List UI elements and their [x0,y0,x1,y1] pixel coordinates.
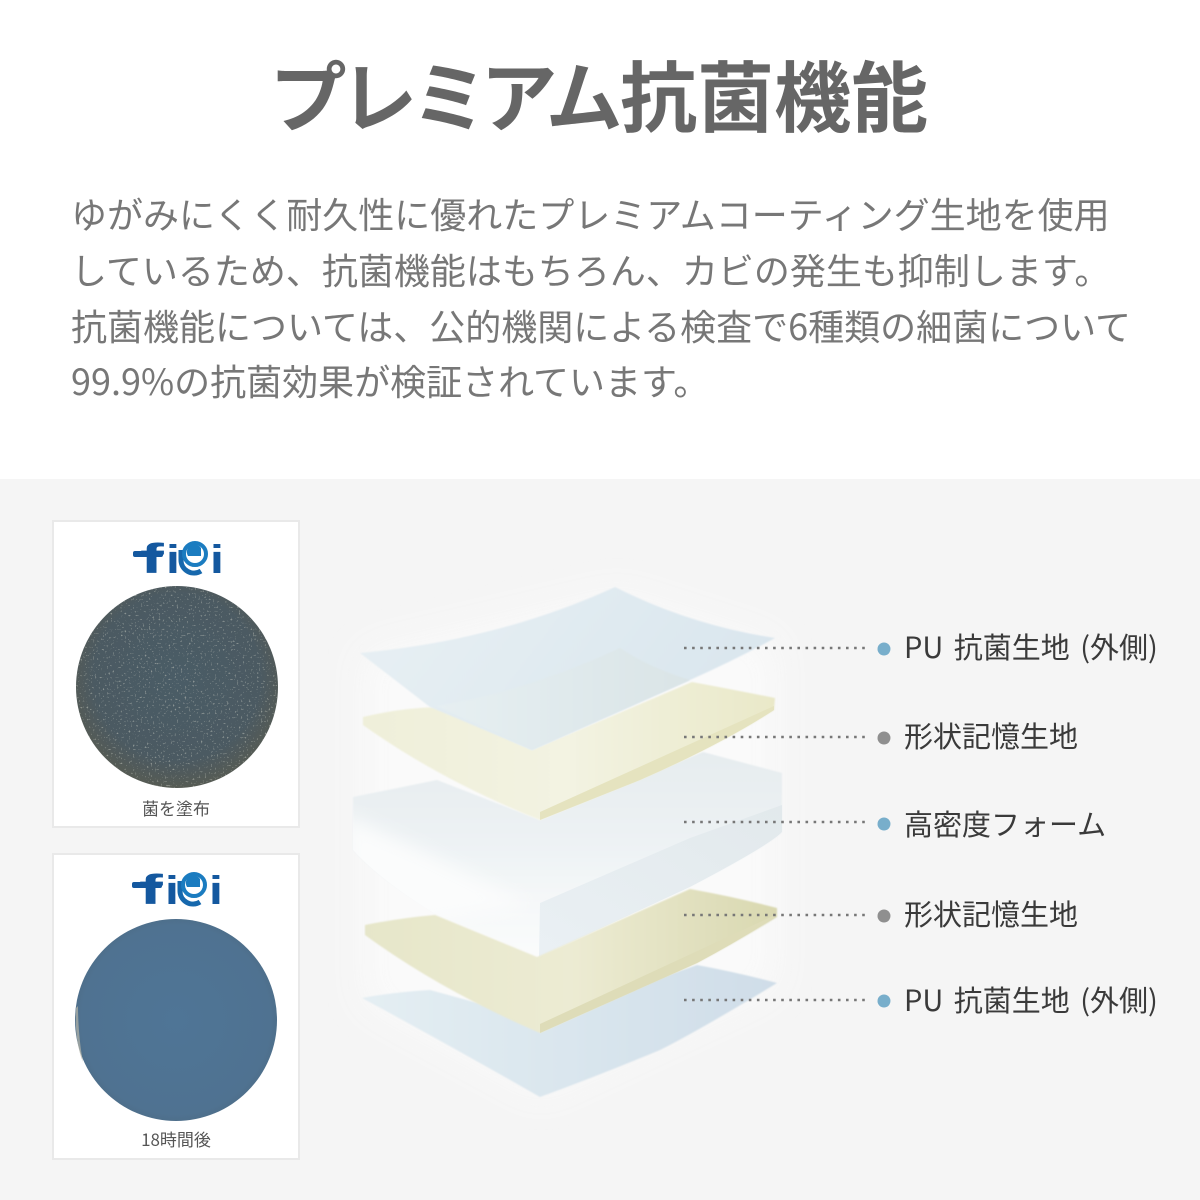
white glow behind stack [365,595,775,1095]
leader lines [684,648,870,1000]
icon: logo [133,538,224,578]
label: outer PU bottom: PU 抗菌生地 (外側) [904,978,1158,1020]
caption: 菌を塗布 [142,795,210,820]
panel: after card [52,853,300,1160]
caption: 18時間後 [141,1126,211,1151]
layer: upper memory foam [363,682,775,820]
icon: logo [132,869,223,909]
layer: top PU sheet [360,587,775,750]
text block: description: しているため、抗菌機能はもちろん、カビの発生も抑制します。 [71,243,1110,295]
label: high density foam: 高密度フォーム [904,802,1106,844]
diagram: mattress layers [354,587,890,1097]
title: プレミアム抗菌機能 [272,38,928,149]
text block: description: ゆがみにくく耐久性に優れたプレミアムコーティング生地を使用 [71,187,1110,239]
chart: clean culture dish [75,919,277,1121]
chart: culture dish with bacteria [76,586,278,788]
label: memory foam top: 形状記憶生地 [904,714,1078,756]
text block: description [71,187,1131,406]
layer: bottom PU sheet [362,965,777,1097]
layer: foam block [345,752,782,957]
text block: description: 抗菌機能については、公的機関による検査で6種類の細菌について [71,299,1131,351]
label: memory foam bottom: 形状記憶生地 [904,892,1078,934]
layer: lower memory foam [365,889,777,1033]
label: outer PU top: PU 抗菌生地 (外側) [904,625,1158,667]
panel: gray background [0,479,1200,1200]
text block: description: 99.9%の抗菌効果が検証されています。 [71,354,709,406]
marker dots [878,642,890,1008]
panel: before card [52,520,300,828]
